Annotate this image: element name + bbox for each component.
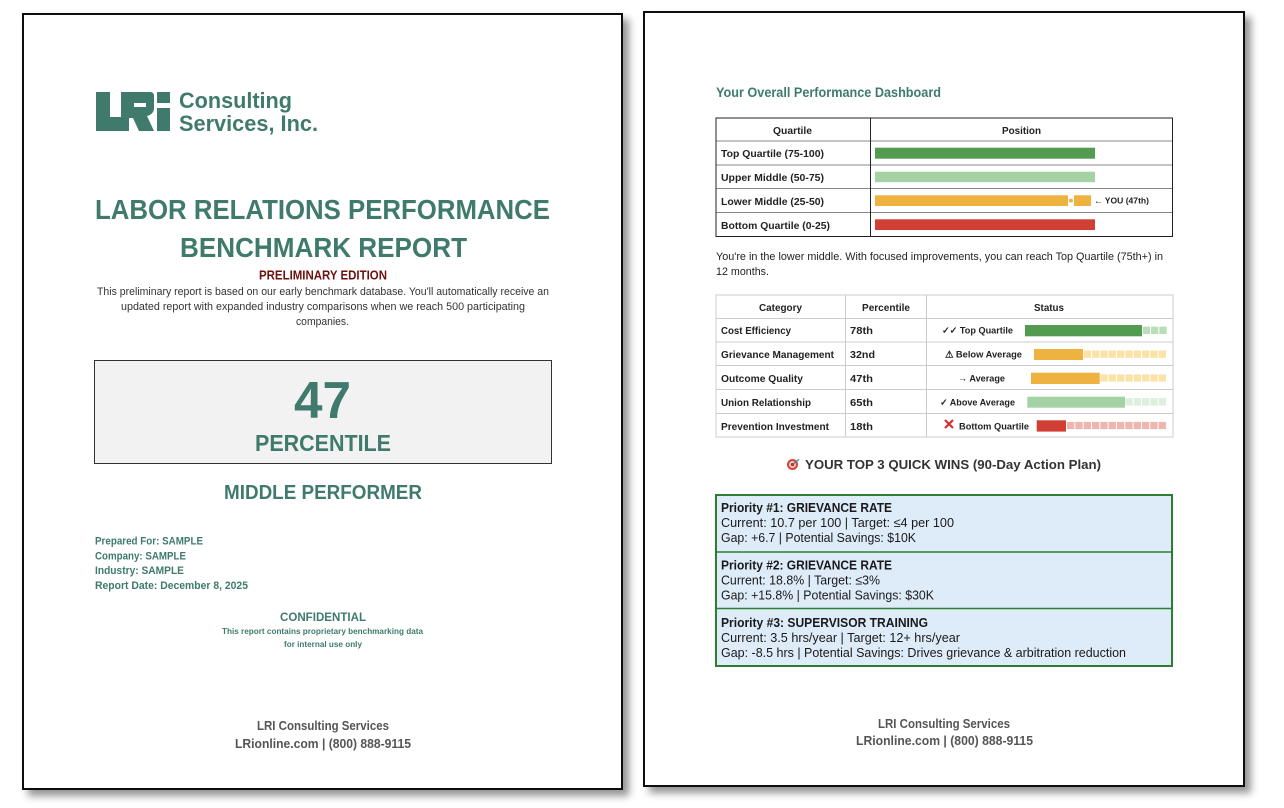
- row: grievance management: [721, 349, 1167, 361]
- row: grievance management: 32nd: [850, 349, 875, 361]
- intro paragraph: [97, 286, 549, 328]
- row: upper middle: Upper Middle (50-75): [721, 172, 824, 184]
- percentile score box: 47: [294, 372, 351, 430]
- row: upper middle: [721, 172, 1095, 184]
- report details: Company: SAMPLE: [95, 550, 186, 562]
- priority 2: Gap: +15.8% | Potential Savings: $30K: [721, 588, 934, 602]
- dashboard heading: Your Overall Performance Dashboard: [716, 85, 941, 100]
- row: lower middle with you marker: ← YOU (47th): [1094, 196, 1149, 206]
- panel: dashboard page: [644, 12, 1244, 786]
- priority 3: Priority #3: SUPERVISOR TRAINING: [721, 615, 928, 630]
- summary text: [716, 251, 1163, 278]
- priority 3: Current: 3.5 hrs/year | Target: 12+ hrs/year: [721, 630, 961, 645]
- title: [95, 194, 550, 263]
- priority 1: [721, 500, 954, 545]
- footer contact: LRionline.com | (800) 888-9115: [856, 733, 1033, 748]
- icon: target: [787, 459, 799, 470]
- report details: Prepared For: SAMPLE: [95, 536, 203, 548]
- edition label: PRELIMINARY EDITION: [259, 268, 387, 282]
- intro paragraph: updated report with expanded industry comparisons when we reach 500 participating: [121, 301, 525, 313]
- row: cost efficiency: 78th: [850, 325, 873, 337]
- logo: [96, 88, 318, 136]
- priority 1: Gap: +6.7 | Potential Savings: $10K: [721, 530, 916, 545]
- row: cost efficiency: ✓✓ Top Quartile: [942, 326, 1013, 336]
- confidential notice: This report contains proprietary benchmarking data: [222, 626, 423, 636]
- row: grievance management: ⚠ Below Average: [945, 350, 1022, 360]
- summary text: 12 months.: [716, 266, 769, 278]
- row: prevention investment: Prevention Investment: [721, 421, 829, 433]
- row: lower middle with you marker: Lower Middle (25-50): [721, 196, 824, 208]
- priority 2: Current: 18.8% | Target: ≤3%: [721, 572, 880, 588]
- confidential notice: [222, 610, 423, 649]
- row: prevention investment: [721, 420, 1167, 433]
- row: cost efficiency: [721, 325, 1167, 337]
- row: prevention investment: 18th: [850, 421, 873, 433]
- footer contact: LRI Consulting Services: [878, 716, 1010, 731]
- row: outcome quality: [721, 373, 1167, 385]
- row: outcome quality: 47th: [850, 373, 873, 385]
- performance tier: MIDDLE PERFORMER: [224, 482, 423, 504]
- row: lower middle with you marker: [721, 195, 1149, 208]
- category status table: Percentile: [862, 302, 910, 314]
- row: union relationship: [721, 397, 1167, 409]
- row: union relationship: Union Relationship: [721, 397, 811, 409]
- priority 1: Priority #1: GRIEVANCE RATE: [721, 500, 892, 515]
- row: outcome quality: → Average: [958, 374, 1005, 384]
- priority action plan: [716, 495, 1172, 666]
- summary text: You're in the lower middle. With focused improvements, you can reach Top Quartile (75th+) in: [716, 251, 1163, 263]
- report details: [95, 536, 248, 592]
- footer contact: LRionline.com | (800) 888-9115: [235, 736, 411, 751]
- category status table: [716, 295, 1173, 437]
- row: outcome quality: Outcome Quality: [721, 373, 803, 385]
- confidential notice: CONFIDENTIAL: [280, 610, 366, 624]
- quick wins heading: YOUR TOP 3 QUICK WINS (90-Day Action Plan): [805, 457, 1101, 472]
- quartile position table: Quartile: [773, 125, 812, 137]
- footer contact: LRI Consulting Services: [257, 718, 389, 733]
- row: union relationship: 65th: [850, 397, 873, 409]
- priority 3: [721, 615, 1126, 660]
- row: bottom quartile: [721, 219, 1095, 232]
- percentile score box: PERCENTILE: [255, 430, 391, 456]
- percentile score box: [94, 360, 552, 464]
- title: BENCHMARK REPORT: [180, 232, 467, 263]
- intro paragraph: companies.: [296, 316, 349, 328]
- priority 3: Gap: -8.5 hrs | Potential Savings: Drives grievance & arbitration reduction: [721, 645, 1126, 660]
- logo text: Consulting: [179, 88, 292, 113]
- category status table: Status: [1034, 302, 1064, 314]
- row: top quartile: [721, 148, 1095, 160]
- priority 1: Current: 10.7 per 100 | Target: ≤4 per 100: [721, 515, 954, 530]
- category status table: Category: [759, 302, 802, 314]
- quartile position table: [716, 118, 1172, 236]
- report details: Industry: SAMPLE: [95, 565, 184, 577]
- confidential notice: for internal use only: [284, 639, 362, 649]
- logo text: Services, Inc.: [179, 111, 318, 136]
- title: LABOR RELATIONS PERFORMANCE: [95, 194, 550, 225]
- priority 2: [721, 558, 934, 602]
- icon: LRI mark: [96, 92, 170, 131]
- row: grievance management: Grievance Management: [721, 349, 834, 361]
- quartile position table: Position: [1002, 125, 1041, 137]
- row: top quartile: Top Quartile (75-100): [721, 148, 824, 160]
- row: prevention investment: Bottom Quartile: [959, 422, 1029, 432]
- row: bottom quartile: Bottom Quartile (0-25): [721, 220, 830, 232]
- footer contact: [235, 718, 411, 751]
- priority 2: Priority #2: GRIEVANCE RATE: [721, 558, 892, 572]
- report details: Report Date: December 8, 2025: [95, 580, 248, 592]
- row: cost efficiency: Cost Efficiency: [721, 325, 791, 337]
- footer contact: [856, 716, 1033, 748]
- panel: cover page: [23, 14, 622, 789]
- intro paragraph: This preliminary report is based on our early benchmark database. You'll automatically receive an: [97, 286, 549, 298]
- row: union relationship: ✓ Above Average: [940, 398, 1015, 408]
- logo text: [179, 88, 318, 136]
